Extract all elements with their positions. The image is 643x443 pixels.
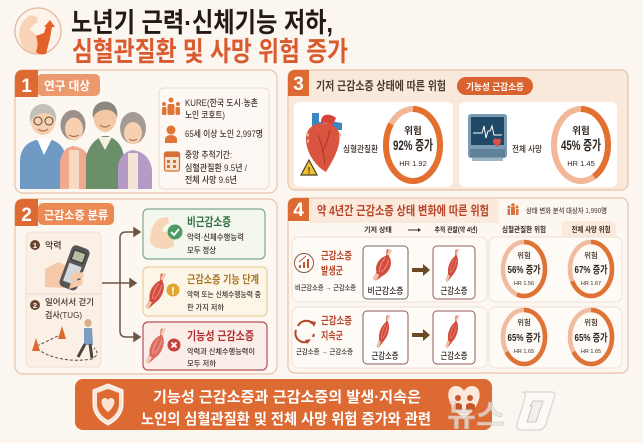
text: follow-up: 전체 사망 9.6년 (185, 174, 237, 185)
icon: healthy arm with check (150, 217, 182, 249)
icon: flexed muscle with arrow (15, 8, 61, 54)
label: grip strength (30, 240, 62, 250)
donut: 45%: 위험 (572, 125, 590, 137)
watermark: News1: 뉴스 (447, 400, 505, 433)
section heading: status change risk: 약 4년간 근감소증 상태 변화에 따른 위험 (317, 203, 489, 218)
donut: 65% cardiovascular: HR 1.65 (514, 349, 534, 355)
card: functional sarcopenia (143, 322, 267, 370)
text: functional stage: 악력 또는 신체수행능력 중 (187, 289, 261, 299)
column headers (364, 221, 616, 239)
icon: muscle with x (144, 326, 180, 367)
donut: 92%: 92% 증가 (393, 138, 433, 153)
donut: 65% cardiovascular: 65% 증가 (508, 331, 541, 344)
label: TUG (30, 297, 94, 320)
donut: 67%: 67% 증가 (574, 263, 608, 276)
icon: heart with family (448, 386, 480, 418)
text: functional sarcopenia: 악력과 신체수행능력이 (187, 346, 255, 356)
text: incident group: 발생군 (321, 265, 343, 277)
arrow (412, 329, 430, 341)
text: incident group (295, 250, 356, 292)
section heading: 근감소증 분류: 근감소증 분류 (44, 209, 108, 222)
section heading: 근감소증 분류 (15, 199, 114, 226)
row: persistent sarcopenia (292, 307, 622, 368)
icon: heart with warning (301, 113, 342, 176)
text: functional stage: 한 가지 저하 (187, 302, 224, 312)
card: functional stage (143, 267, 267, 316)
card: follow-up sarcopenia (433, 246, 475, 299)
conclusion banner (75, 379, 492, 430)
text: cohort (185, 98, 258, 120)
icon: person (165, 126, 177, 143)
text: functional stage (187, 272, 261, 312)
icon: heart with warning: ! (308, 166, 310, 176)
section heading: 연구 대상 (15, 70, 100, 97)
donut: 56%: 56% 증가 (508, 263, 541, 276)
note: analysis population (508, 203, 607, 215)
donut: 92%: HR 1.92 (399, 159, 427, 168)
section heading: status change risk: 4 (293, 200, 304, 221)
donut: 45% (554, 109, 608, 181)
card: normal (143, 209, 265, 259)
text: follow-up: 중앙 추적기간: (185, 149, 232, 160)
icon: vital signs monitor (468, 114, 507, 161)
column headers: 추적 관찰(약 4년) (434, 225, 478, 234)
badge: functional sarcopenia: 기능성 근감소증 (466, 81, 524, 92)
text: conclusion: 노인의 심혈관질환 및 전체 사망 위험 증가와 관련 (141, 411, 431, 428)
text: normal (187, 215, 244, 255)
panel: 1 study population (15, 70, 277, 193)
watermark: News1 (447, 392, 555, 433)
text: persistent group: 근감소증 (321, 315, 352, 327)
section heading: baseline risk (288, 70, 446, 96)
donut: 65% cardiovascular: 위험 (517, 317, 531, 327)
card: cardiovascular disease (294, 102, 453, 187)
label: TUG: 검사(TUG) (45, 310, 82, 320)
label: all-cause death: 전체 사망 (512, 144, 542, 154)
text: normal: 악력·신체수행능력 (187, 232, 244, 242)
card: all-cause death (459, 102, 617, 187)
info box (159, 88, 269, 189)
icon: cycle arrows (295, 321, 316, 344)
donut: 65% death: 65% 증가 (574, 331, 608, 344)
donut: 56% (503, 242, 545, 296)
section heading: 연구 대상: 1 (21, 76, 32, 97)
donut: 65% death (570, 310, 612, 364)
title: 노년기 근력·신체기능 저하, (71, 8, 333, 38)
text: incident group: 근감소증 (321, 250, 352, 262)
text: normal: 모두 정상 (187, 245, 217, 255)
donut: 92% (386, 109, 440, 181)
label: TUG: 2 (33, 301, 37, 310)
text: persistent group: 지속군 (321, 330, 343, 342)
donut: 65% death: 위험 (584, 317, 598, 327)
panel: measurements (26, 232, 101, 367)
card: baseline sarcopenia (363, 311, 408, 364)
illustration: TUG course (32, 319, 97, 360)
text: functional sarcopenia: 기능성 근감소증 (187, 328, 254, 343)
donut: 92%: 위험 (404, 125, 422, 137)
text: cohort: KURE(한국 도시·농촌 (185, 98, 258, 108)
row: incident sarcopenia (292, 237, 622, 302)
icon: hand dynamometer (45, 244, 91, 292)
label: cardiovascular: 심혈관질환 (343, 144, 378, 154)
column headers: 심혈관질환 위험 (502, 224, 546, 234)
label: grip strength: 1 (33, 241, 37, 250)
text: functional sarcopenia (187, 328, 255, 368)
section heading: baseline risk: 3 (293, 74, 304, 95)
donut: 45%: 45% 증가 (561, 138, 601, 153)
donut: 56%: HR 1.56 (514, 281, 534, 287)
label: grip strength: 악력 (45, 240, 62, 250)
text: persistent group: 근감소증 → 근감소증 (296, 347, 353, 356)
column headers: 전체 사망 위험 (572, 224, 611, 234)
title: 심혈관질환 및 사망 위험 증가 (72, 37, 348, 67)
text: participants: 65세 이상 노인 2,997명 (185, 128, 263, 139)
donut: 56%: 위험 (517, 250, 531, 260)
label: TUG: 일어서서 걷기 (45, 297, 94, 307)
text: conclusion (141, 389, 431, 428)
card: baseline sarcopenia: 근감소증 (372, 350, 398, 361)
icon: people group (162, 98, 180, 115)
card: follow-up sarcopenia: 근감소증 (440, 285, 468, 296)
panel: 2 sarcopenia classification (15, 199, 277, 374)
text: incident group: 비근감소증 → 근감소증 (295, 283, 356, 292)
illustration: four older adults (20, 102, 152, 189)
text: functional stage: 근감소증 기능 단계 (187, 272, 259, 286)
card: baseline non-sarcopenia: 비근감소증 (368, 285, 404, 296)
section heading: 연구 대상: 연구 대상 (44, 79, 90, 93)
icon: rising chart (294, 254, 314, 272)
badge: functional sarcopenia (457, 77, 533, 95)
card: follow-up persistent (433, 311, 475, 364)
card: baseline non-sarcopenia (363, 246, 408, 299)
card: follow-up persistent: 근감소증 (440, 350, 468, 361)
donut: 67% (570, 242, 612, 296)
text: cohort: 노인 코호트) (185, 110, 225, 120)
donut: 65% cardiovascular (503, 310, 545, 364)
panel: 3 baseline sarcopenia risk (288, 70, 628, 190)
text: follow-up: 심혈관질환 9.5년 / (185, 162, 247, 173)
arrows: classification flow (102, 228, 140, 341)
section heading: status change risk (288, 198, 499, 223)
text: persistent group (296, 315, 353, 356)
section heading: baseline risk: 기저 근감소증 상태에 따른 위험 (316, 78, 446, 93)
donut: 67%: 위험 (584, 250, 598, 260)
text: follow-up (185, 149, 247, 185)
title (71, 8, 348, 67)
panel: 4 risk by status change (288, 198, 628, 373)
column headers: 기저 상태 (364, 225, 392, 234)
donut: 65% death: HR 1.65 (581, 349, 601, 355)
text: functional sarcopenia: 모두 저하 (187, 358, 216, 368)
icon: shield with heart (93, 384, 123, 425)
donut: 67%: HR 1.67 (581, 281, 601, 287)
text: conclusion: 기능성 근감소증과 근감소증의 발생·지속은 (153, 389, 421, 406)
section heading: 근감소증 분류: 2 (21, 205, 32, 226)
arrow (412, 264, 430, 276)
note: analysis population: 상태 변화 분석 대상자 1,990명 (526, 206, 607, 215)
icon: calendar (164, 152, 180, 171)
donut: 45%: HR 1.45 (567, 159, 595, 168)
text: normal: 비근감소증 (187, 215, 231, 229)
icon: muscle with warning: ! (171, 286, 175, 298)
